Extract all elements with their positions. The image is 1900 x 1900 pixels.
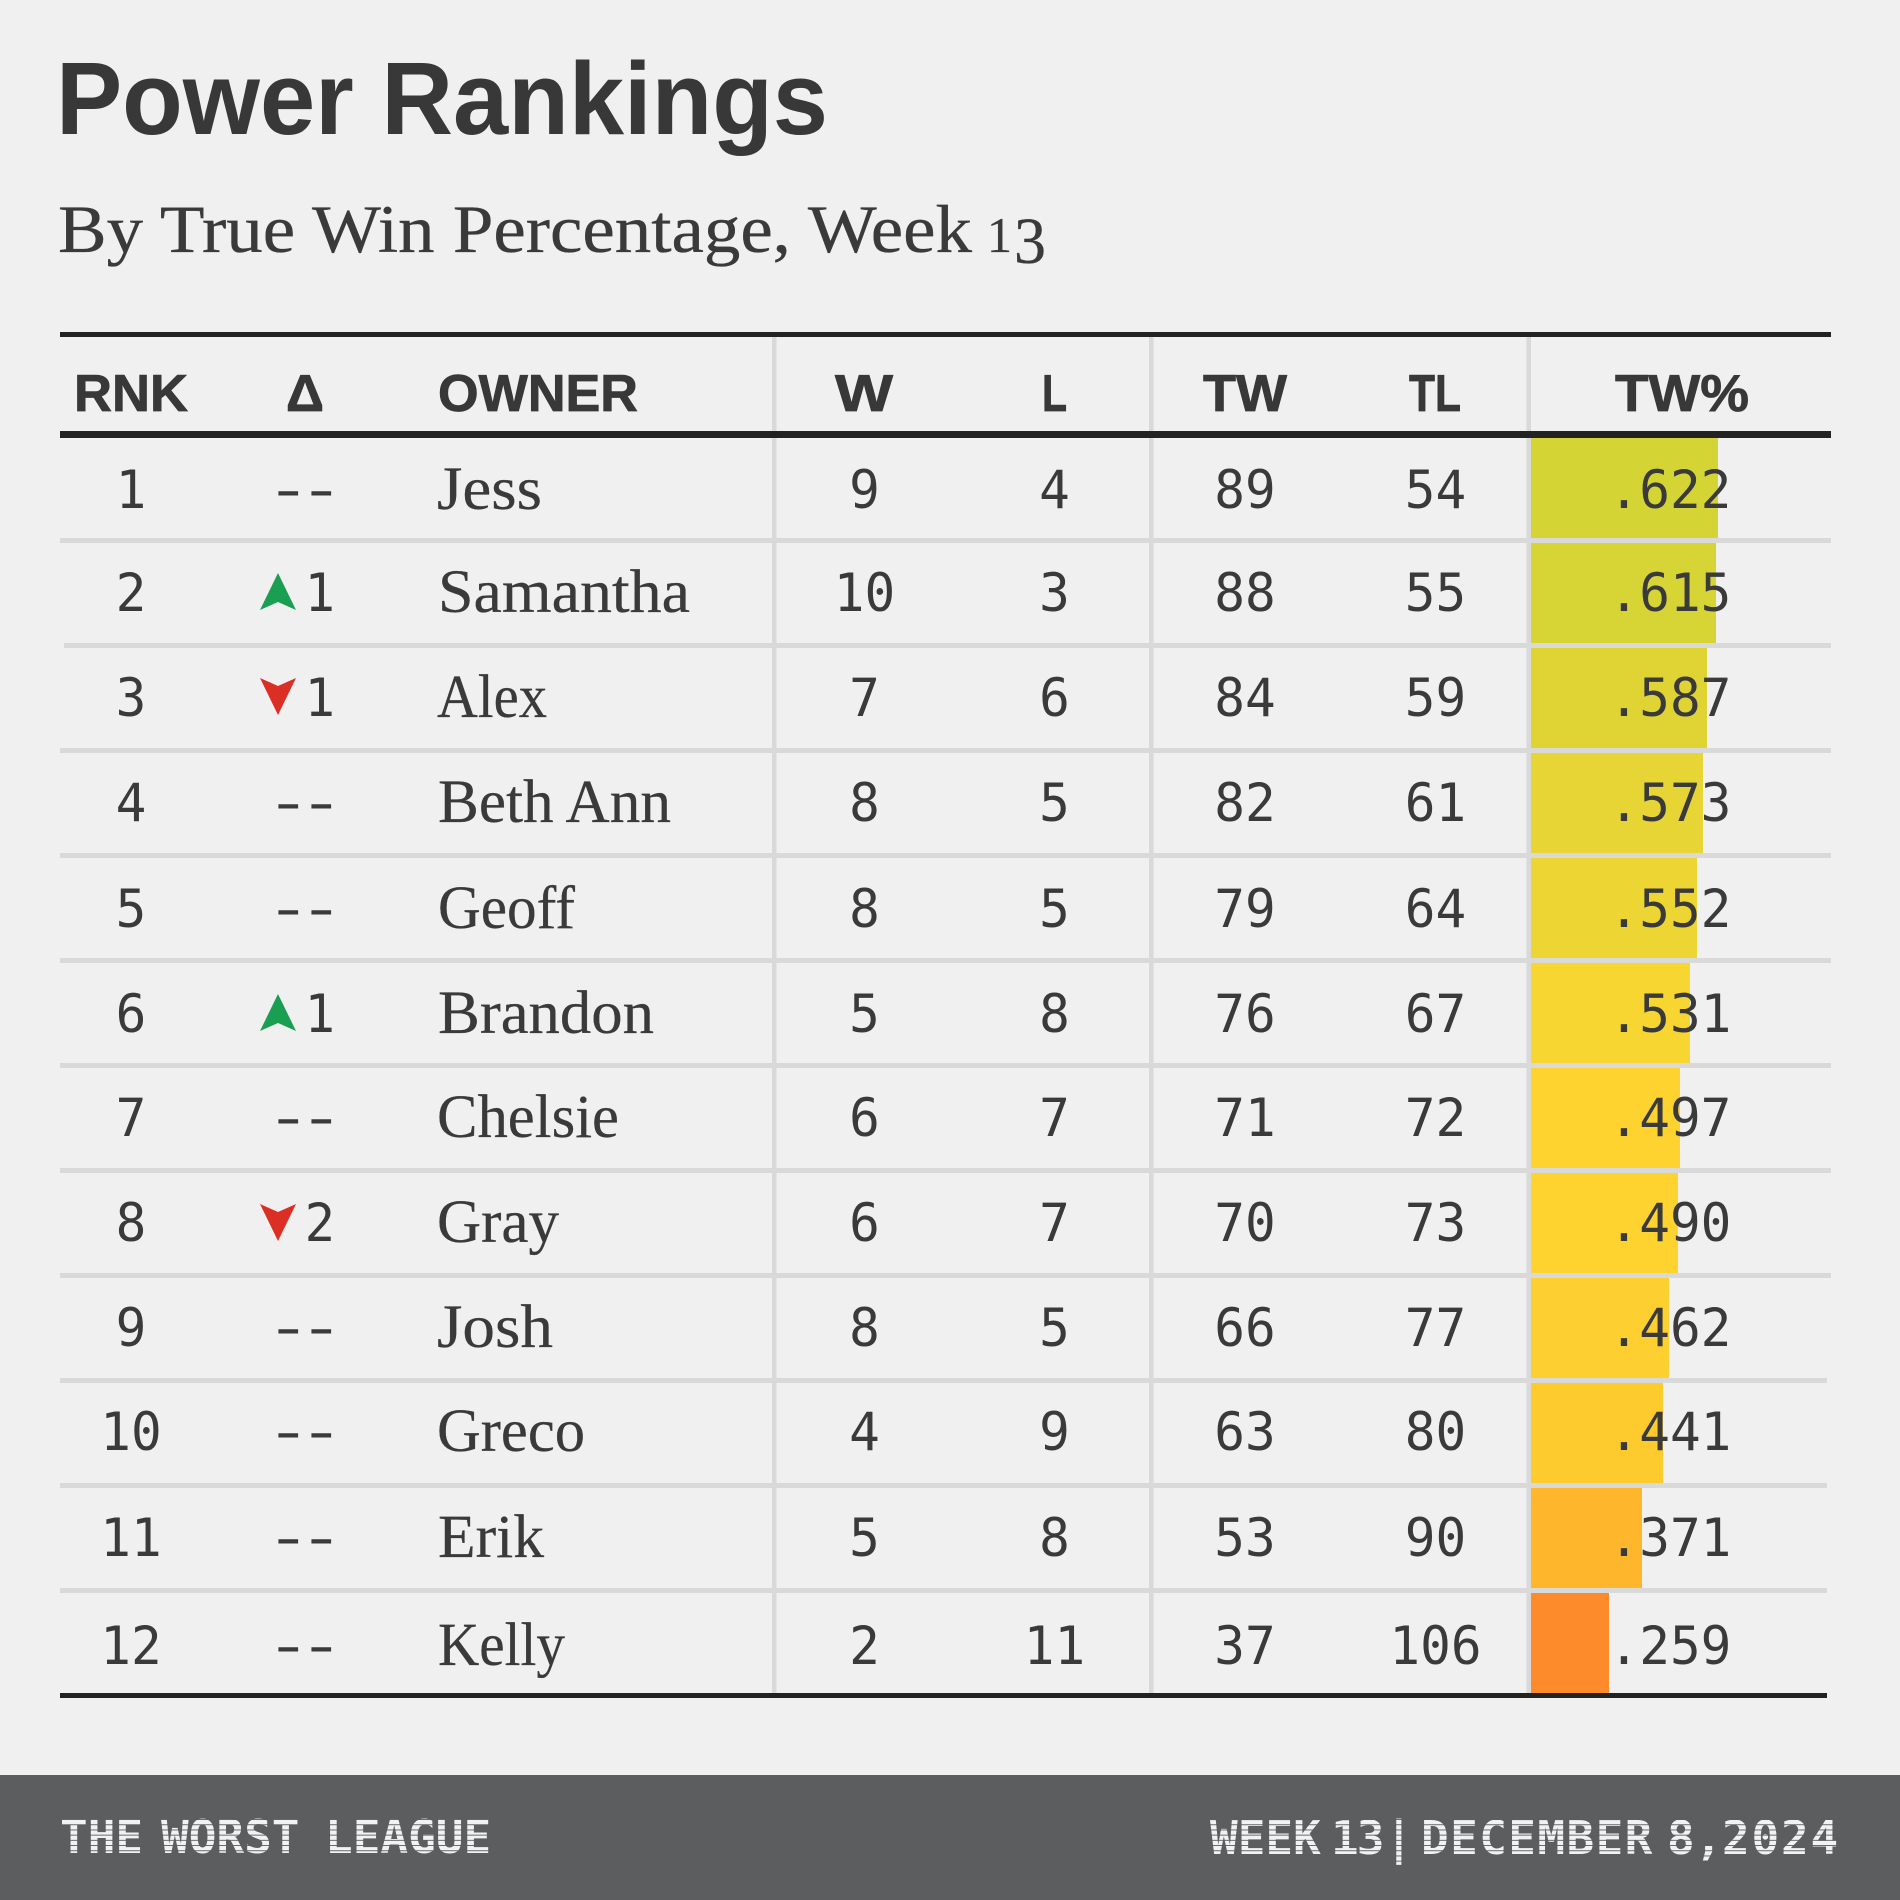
row 3: Alex: 1	[305, 668, 335, 729]
row 9: Josh: 9	[116, 1298, 146, 1359]
row 5: Geoff: 5	[1039, 879, 1070, 940]
row 6: Brandon: .531	[1609, 984, 1731, 1045]
row 11: Erik: 53	[1214, 1508, 1276, 1569]
row 12: Kelly: 12	[100, 1616, 162, 1677]
row 4: Beth Ann: 5	[1039, 773, 1070, 834]
row 2: Samantha: 1	[305, 563, 335, 624]
row 2: Samantha: Samantha	[438, 559, 690, 626]
row 10: Greco	[100, 1398, 1731, 1465]
row 4: Beth Ann: .573	[1609, 773, 1731, 834]
footer: week and date: 8,	[1667, 1811, 1722, 1865]
row 6: Brandon	[116, 980, 1731, 1047]
row 9: Josh: 8	[849, 1298, 880, 1359]
row 4: Beth Ann: 4	[116, 773, 146, 834]
row 2: Samantha: 2	[116, 563, 146, 624]
footer: week and date: |	[1385, 1811, 1413, 1866]
row 12: Kelly: 106	[1389, 1616, 1482, 1677]
row 12: Kelly: --	[265, 1615, 332, 1677]
table header: TW	[1203, 365, 1288, 423]
row 11: Erik: 90	[1405, 1508, 1466, 1569]
icon: down arrow	[260, 678, 296, 715]
row 8: Gray: 70	[1214, 1193, 1276, 1254]
title: Power Rankings	[56, 41, 828, 156]
row 9: Josh: 77	[1405, 1298, 1466, 1359]
row 5: Geoff: --	[265, 878, 332, 940]
row 12: Kelly: .259	[1609, 1616, 1731, 1677]
table header: Δ	[286, 365, 324, 423]
table header: L	[1042, 365, 1067, 423]
table header: RNK	[74, 365, 188, 423]
row 1: Jess: 89	[1214, 460, 1276, 521]
row 1: Jess: 54	[1405, 460, 1466, 521]
row 4: Beth Ann	[116, 769, 1731, 836]
subtitle: 1	[987, 207, 1012, 263]
row 4: Beth Ann: 61	[1405, 773, 1466, 834]
row 11: Erik: 5	[849, 1508, 880, 1569]
row 11: Erik: .371	[1609, 1508, 1731, 1569]
bar chart: true win percentage bars	[1531, 438, 1718, 1693]
row 7: Chelsie: --	[265, 1087, 332, 1149]
icon: down arrow	[260, 1204, 296, 1241]
row 10: Greco: 4	[849, 1402, 880, 1463]
footer: week and date: DECEMBER	[1421, 1811, 1654, 1865]
row 3: Alex: 6	[1039, 668, 1070, 729]
row 10: Greco: Greco	[437, 1398, 585, 1465]
footer: league name: WORST	[161, 1810, 299, 1864]
row 1: Jess: .622	[1609, 460, 1731, 521]
row 9: Josh: Josh	[437, 1294, 553, 1361]
row 8: Gray: 2	[305, 1193, 335, 1254]
table header	[74, 365, 1749, 423]
table header: OWNER	[438, 365, 638, 423]
row 5: Geoff: Geoff	[438, 875, 576, 942]
row 8: Gray: 8	[116, 1193, 146, 1254]
row 12: Kelly: 11	[1024, 1616, 1085, 1677]
row 1: Jess	[116, 456, 1731, 523]
row 2: Samantha: 88	[1214, 563, 1276, 624]
row 11: Erik: 11	[100, 1508, 162, 1569]
row 6: Brandon: Brandon	[438, 980, 654, 1047]
row 2: Samantha	[116, 559, 1731, 626]
row 3: Alex: 3	[116, 668, 146, 729]
row 9: Josh: 66	[1214, 1298, 1276, 1359]
row 7: Chelsie: 6	[849, 1088, 880, 1149]
row 6: Brandon: 67	[1405, 984, 1466, 1045]
row 9: Josh: --	[265, 1297, 332, 1359]
row 12: Kelly: 37	[1214, 1616, 1276, 1677]
row 5: Geoff: 79	[1214, 879, 1276, 940]
row 5: Geoff: 8	[849, 879, 880, 940]
row 2: Samantha: 3	[1039, 563, 1070, 624]
footer: week and date: 2024	[1722, 1811, 1840, 1865]
row 10: Greco: 80	[1405, 1402, 1466, 1463]
row 11: Erik: Erik	[438, 1504, 544, 1571]
subtitle: 3	[1014, 205, 1046, 278]
row 5: Geoff	[116, 875, 1731, 942]
row 10: Greco: .441	[1609, 1402, 1731, 1463]
footer band	[0, 1775, 1900, 1900]
row 10: Greco: 63	[1214, 1402, 1276, 1463]
row 9: Josh: .462	[1609, 1298, 1731, 1359]
row 2: Samantha: .615	[1609, 563, 1731, 624]
row 8: Gray: 7	[1039, 1193, 1070, 1254]
row 7: Chelsie: 7	[116, 1088, 146, 1149]
row 5: Geoff: 64	[1405, 879, 1466, 940]
row 8: Gray	[116, 1189, 1731, 1256]
row 4: Beth Ann: Beth Ann	[438, 769, 671, 836]
row 7: Chelsie: .497	[1609, 1088, 1731, 1149]
row 7: Chelsie	[116, 1084, 1731, 1151]
row 1: Jess: 4	[1039, 460, 1070, 521]
row 8: Gray: 6	[849, 1193, 880, 1254]
row 3: Alex: Alex	[437, 664, 547, 731]
subtitle: By True Win Percentage, Week	[58, 191, 972, 267]
row 6: Brandon: 6	[116, 984, 146, 1045]
row 4: Beth Ann: --	[265, 772, 332, 834]
row 7: Chelsie: 71	[1214, 1088, 1276, 1149]
row 3: Alex: 7	[849, 668, 880, 729]
table header: W	[835, 365, 894, 423]
row 5: Geoff: 5	[116, 879, 146, 940]
row 6: Brandon: 76	[1214, 984, 1276, 1045]
row 1: Jess: 9	[849, 460, 880, 521]
icon: up arrow	[260, 573, 296, 610]
footer: league name: THE	[60, 1810, 143, 1864]
row 8: Gray: Gray	[437, 1189, 559, 1256]
footer: week and date: WEEK	[1210, 1811, 1321, 1865]
row 9: Josh	[116, 1294, 1731, 1361]
row 3: Alex: 84	[1214, 668, 1276, 729]
row 6: Brandon: 8	[1039, 984, 1070, 1045]
row 1: Jess: Jess	[437, 456, 542, 523]
row 8: Gray: 73	[1405, 1193, 1466, 1254]
row 3: Alex: .587	[1609, 668, 1731, 729]
table header: TW%	[1615, 365, 1749, 423]
row 12: Kelly: Kelly	[438, 1612, 565, 1679]
row 12: Kelly: 2	[849, 1616, 880, 1677]
row 11: Erik: --	[265, 1507, 332, 1569]
row 4: Beth Ann: 8	[849, 773, 880, 834]
footer: league name: LEAGUE	[325, 1810, 491, 1864]
row 4: Beth Ann: 82	[1214, 773, 1276, 834]
row 8: Gray: .490	[1609, 1193, 1731, 1254]
row 2: Samantha: 55	[1405, 563, 1466, 624]
row 1: Jess: --	[265, 459, 332, 521]
row 9: Josh: 5	[1039, 1298, 1070, 1359]
row 12: Kelly	[100, 1612, 1731, 1679]
row 3: Alex	[116, 664, 1731, 731]
row 3: Alex: 59	[1405, 668, 1466, 729]
icon: up arrow	[260, 994, 296, 1031]
panel: rankings table	[60, 332, 1831, 1698]
row 1: Jess: 1	[116, 460, 146, 521]
row 10: Greco: 9	[1039, 1402, 1070, 1463]
row 7: Chelsie: 72	[1405, 1088, 1466, 1149]
row 2: Samantha: 10	[834, 563, 895, 624]
row 5: Geoff: .552	[1609, 879, 1731, 940]
row 10: Greco: 10	[100, 1402, 162, 1463]
footer: week and date: 13	[1331, 1811, 1382, 1865]
row 11: Erik	[100, 1504, 1731, 1571]
row 11: Erik: 8	[1039, 1508, 1070, 1569]
table header: TL	[1409, 365, 1461, 423]
row 10: Greco: --	[265, 1401, 332, 1463]
row 7: Chelsie: Chelsie	[437, 1084, 619, 1151]
row 6: Brandon: 1	[305, 984, 335, 1045]
row 6: Brandon: 5	[849, 984, 880, 1045]
row 7: Chelsie: 7	[1039, 1088, 1070, 1149]
